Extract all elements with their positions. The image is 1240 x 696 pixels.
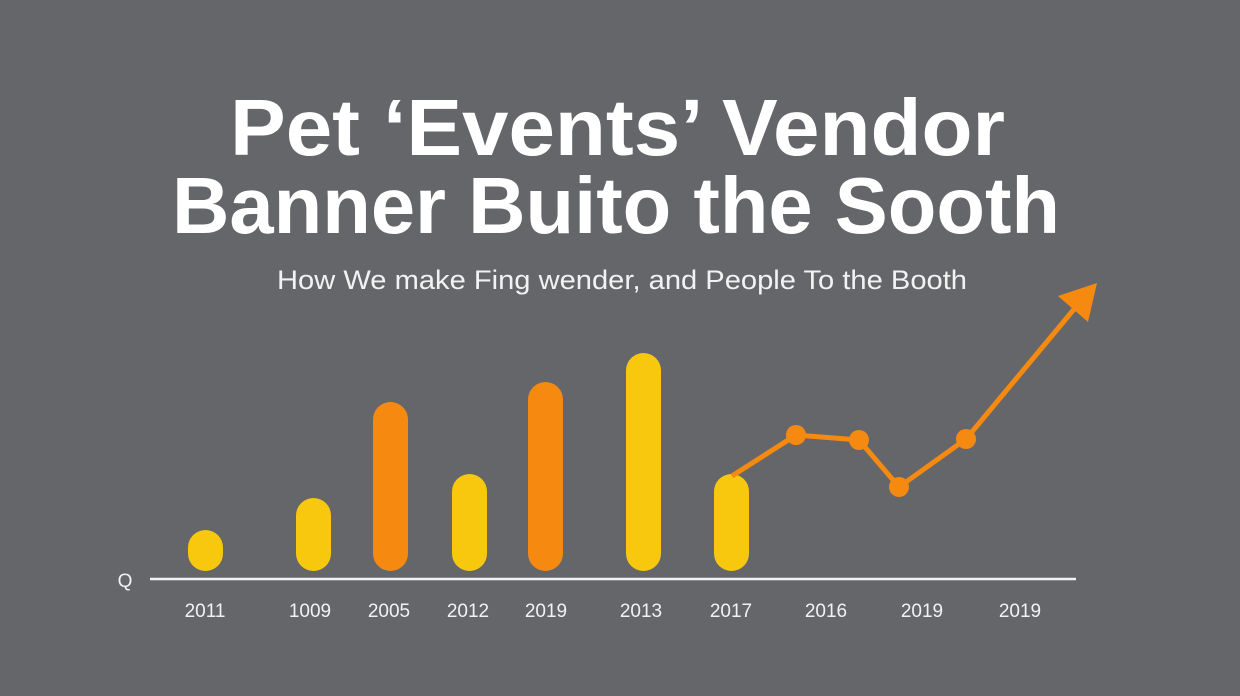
title: Banner Buito the Sooth	[172, 161, 1060, 250]
bar chart	[188, 353, 749, 571]
axis labels	[185, 601, 1041, 622]
axis labels: 2016	[805, 601, 847, 622]
axis labels: 2005	[368, 601, 410, 622]
axis labels: 2011	[185, 601, 225, 622]
axis labels: 2017	[710, 601, 752, 622]
subtitle: How We make Fing wender, and People To the Booth	[277, 265, 967, 295]
axis labels: 2019	[901, 601, 943, 622]
line chart with arrow	[732, 283, 1097, 497]
axis labels: 2019	[525, 601, 567, 622]
axis labels: 2012	[447, 601, 489, 622]
axis labels: 2013	[620, 601, 662, 622]
axis labels: 1009	[289, 601, 331, 622]
axis: Q	[118, 571, 132, 592]
title: Pet ‘Events’ Vendor	[230, 83, 1005, 172]
title	[172, 83, 1060, 250]
axis labels: 2019	[999, 601, 1041, 622]
